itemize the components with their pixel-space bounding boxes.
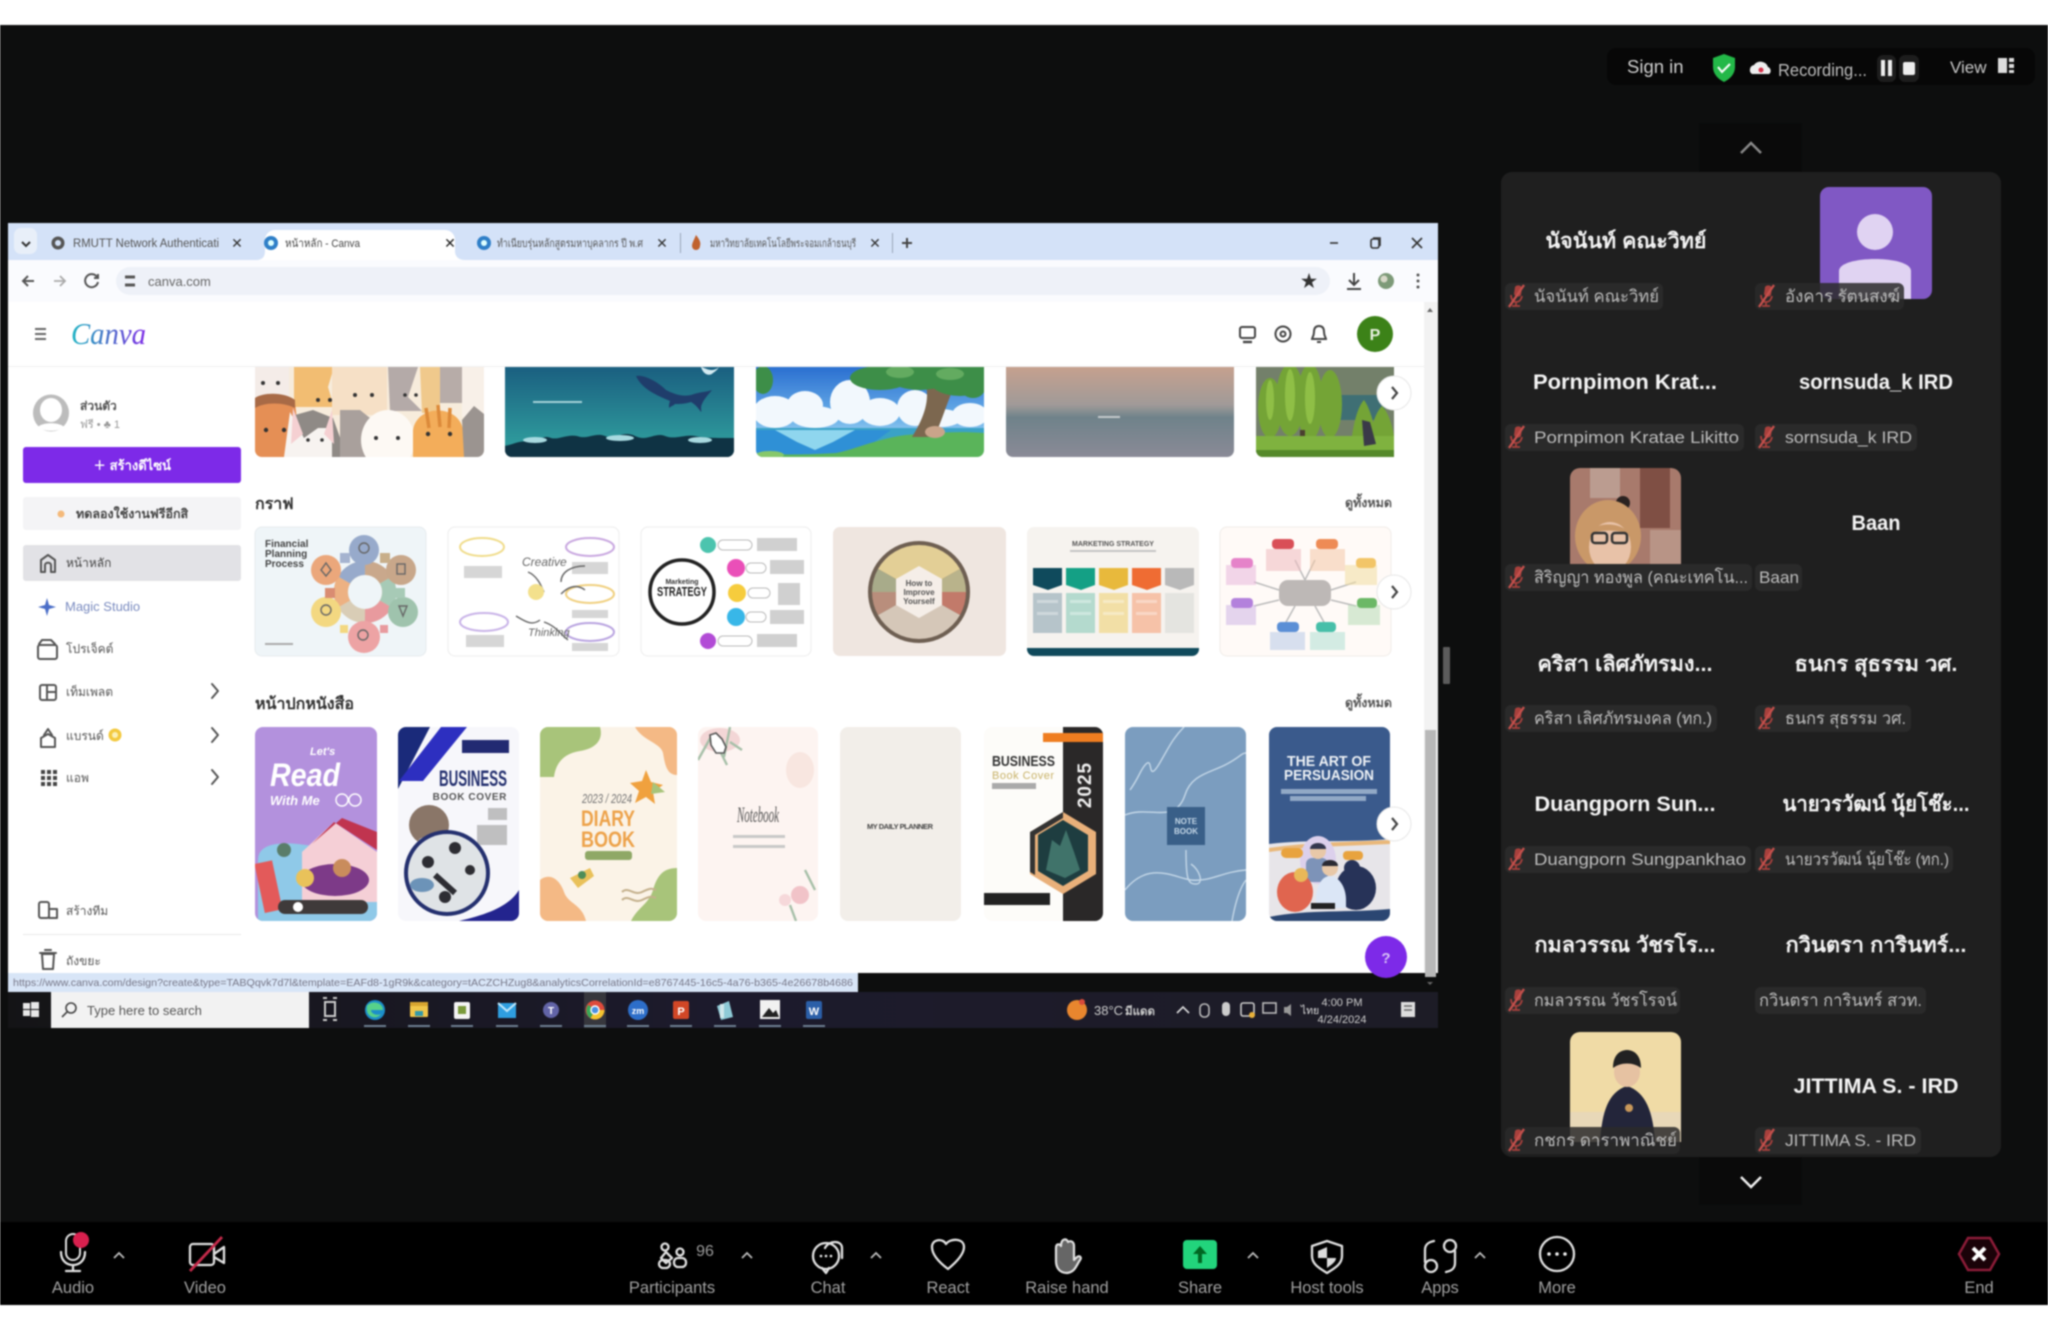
user profile: ฟรี • ♣ 1 [80,418,120,431]
taskbar app icons: zm [632,1006,644,1016]
menu: create team: สร้างทีม [66,904,108,918]
participant: JITTIMA [1755,1075,1958,1154]
system tray: ไทย [1300,1004,1319,1017]
address bar: canva.com [148,274,211,289]
tab: document [477,235,668,251]
menu: projects [38,640,113,659]
book: business book cover: BUSINESS [439,766,507,791]
participant: คริสา: คริสา เลิศภัทรมง... [1538,653,1712,676]
view: View [1950,58,1987,77]
card: concept map tags [1220,527,1391,656]
image row of cats and landscapes [254,366,1412,458]
participants panel [1501,172,2001,1157]
react control: React [926,1279,970,1297]
tab: university: ✕ [869,235,881,251]
tab: university: มหาวิทยาลัยเทคโนโลยีพระจอมเกล้าธนบุรี [710,236,856,250]
menu: home: หน้าหลัก [66,556,111,570]
end control [1959,1238,1999,1297]
top status bar [1607,48,2035,85]
icon: settings [1276,326,1290,342]
profile avatar P: P [1370,327,1381,344]
icon: monitor [1240,327,1255,342]
share control: Share [1178,1279,1222,1297]
address bar [8,260,1438,302]
participant: JITTIMA: JITTIMA S. - IRD [1785,1131,1916,1150]
book: daily planner [840,727,961,921]
book: diary book: BOOK [581,827,635,852]
chevron up button [1699,123,1802,172]
taskbar app icons: W [809,1006,820,1018]
participant: Duangporn: Duangporn Sun... [1534,793,1716,816]
see all link: ดูทั้งหมด [1345,493,1392,511]
image: whale at night [505,367,734,458]
carousel arrow [1377,376,1411,410]
participant: sornsuda [1755,371,1953,451]
participant: กวินตรา [1755,933,1966,1014]
react control [926,1240,970,1297]
taskbar app icons: P [677,1006,685,1018]
participant: กวินตรา: กวินตรา การินทร์... [1786,933,1966,957]
participant: ธนกร: ธนกร สุธรรม วศ. [1785,709,1906,729]
card: financial planning wheel: Financial [265,539,309,550]
participant: นายวรวัฒน์: นายวรวัฒน์ นุ้ยโช๊ะ... [1782,791,1970,818]
end control: End [1964,1279,1994,1297]
audio control: Audio [52,1279,94,1297]
menu: magic studio: Magic Studio [65,599,140,614]
card: marketing strategy columns: MARKETING STRATEGY [1072,541,1154,548]
participant: Baan: Baan [1759,568,1799,587]
help button: ? [1381,950,1391,967]
sign in: Sign in [1627,56,1684,77]
participants control [629,1243,752,1297]
panel splitter handle [1443,647,1450,684]
tab: active Canva: หน้าหลัก - Canva [285,238,361,250]
sidebar [23,394,241,969]
section heading: graphics: กราฟ [255,496,294,513]
address bar: ★ [1300,272,1318,291]
book: Let's Read With Me [254,727,377,921]
trial button: ทดลองใช้งานฟรีอีกสิ [76,506,189,521]
book: note book [1125,727,1246,921]
pause and stop buttons [1877,55,1919,82]
start button [23,1002,39,1017]
book: business book cover [398,727,519,921]
participant: กชกร ดาราพาณิชย์: กชกร ดาราพาณิชย์ [1534,1131,1677,1150]
participant: sornsuda: sornsuda_k IRD [1785,428,1912,447]
menu: templates [40,684,218,700]
more control [1538,1237,1576,1297]
participant: กมลวรรณ [1505,932,1716,1014]
book: business 2025: BUSINESS [992,753,1055,770]
video control: Video [184,1279,226,1297]
system tray: 4:00 PM [1322,997,1362,1009]
participant: สิริญญา ทองพูล [1505,468,1752,591]
Canva page background [8,302,1438,973]
participant: JITTIMA: JITTIMA S. - IRD [1794,1075,1958,1098]
chevron down button [1699,1157,1802,1205]
white bottom band [0,1305,2048,1331]
card: how to improve yourself: Yourself [903,597,935,606]
image: dusk sea [1006,367,1234,457]
page scrollbar [1424,302,1438,985]
participant: นัจนันท์ คณะวิทย์: นัจนันท์ คณะวิทย์ [1534,287,1659,306]
menu: home [23,545,241,581]
video control [184,1237,226,1297]
participant: Pornpimon: Pornpimon Kratae Likitto [1534,428,1739,447]
book: diary book: DIARY [581,806,635,831]
card: marketing strategy: STRATEGY [657,585,707,599]
menu: templates: เท็มเพลต [66,684,113,699]
menu: apps [41,770,218,786]
share control [1178,1240,1258,1297]
weather [1067,999,1155,1020]
card: how to improve yourself: Improve [903,588,935,597]
book: notebook with flowers: Notebook [737,802,780,827]
participant: Pornpimon [1505,371,1744,451]
taskbar app icons [364,992,825,1028]
system tray [1177,997,1415,1026]
image: willow trees [1256,364,1394,457]
menu: create team [39,902,108,918]
taskbar app icons: T [548,1006,554,1017]
book cover row [254,727,1411,921]
weather: 38°C [1094,1003,1123,1018]
graphic cards row [255,527,1411,656]
recording status: Recording... [1778,60,1867,80]
tab: RMUTT [52,235,243,251]
card: mind map: Thinking [528,627,570,639]
participant: คริสา [1505,653,1717,732]
participant: sornsuda: sornsuda_k IRD [1799,371,1953,394]
user profile [33,394,120,432]
menu: brand: แบรนด์ [66,729,104,743]
mouse cursor [710,733,726,753]
menu: projects: โปรเจ็คต์ [66,641,113,656]
book: daily planner: MY DAILY PLANNER [867,822,934,831]
card: marketing strategy [641,527,811,656]
book: the art of persuasion: PERSUASION [1284,768,1374,784]
window controls [1330,238,1422,248]
book: note book: NOTE [1175,817,1198,826]
participants control: 96 [696,1243,714,1260]
icon: bell [1312,326,1326,342]
participant: Pornpimon: Pornpimon Krat... [1533,371,1717,394]
participant: สิริญญา ทองพูล: สิริญญา ทองพูล (คณะเทคโน... [1534,567,1748,588]
participant: นายวรวัฒน์: นายวรวัฒน์ นุ้ยโช๊ะ (ทก.) [1785,849,1949,870]
create design button: ＋ สร้างดีไซน์ [93,457,171,473]
tab: active Canva [256,230,465,260]
carousel arrow [1377,575,1411,609]
participant: นัจนันท์ คณะวิทย์ [1505,229,1706,310]
shared browser window [8,223,1438,1028]
see all link: ดูทั้งหมด [1345,693,1392,711]
host tools control [1290,1241,1364,1297]
participant: ธนกร [1755,653,1958,732]
card: financial planning wheel: Process [265,559,304,570]
participant: Duangporn [1505,793,1751,873]
menu: trash: ถังขยะ [66,954,101,968]
search box: Type here to search [87,1003,202,1018]
card: financial planning wheel: Planning [265,549,307,560]
image: cats [255,367,484,470]
card: mind map [448,527,619,656]
participant: กวินตรา: กวินตรา การินทร์ สวท. [1759,991,1922,1010]
participant: นายวรวัฒน์ [1755,791,1970,873]
book: business 2025: 2025 [1075,762,1096,808]
book: the art of persuasion [1269,727,1390,921]
card: marketing strategy: Marketing [665,579,699,586]
tab: RMUTT: ✕ [231,235,243,251]
icon: green security shield [1713,54,1735,82]
menu: trash [40,950,101,969]
book: Let's Read With Me: Read [270,757,341,793]
weather: มีแดด [1125,1005,1155,1018]
menu: apps: แอพ [66,771,89,785]
Canva logo: Canva [71,316,146,351]
chat control: Chat [811,1279,846,1297]
help button [1365,936,1407,978]
participant: กชกร ดาราพาณิชย์ [1505,1032,1681,1154]
trial button [23,497,241,530]
user profile: ส่วนตัว [80,399,117,413]
apps control [1421,1240,1485,1297]
participant: คริสา: คริสา เลิศภัทรมงคล (ทก.) [1534,709,1712,728]
participants control: Participants [629,1279,715,1297]
task view [323,998,337,1020]
create design button [23,447,241,483]
system tray: 4/24/2024 [1318,1014,1366,1026]
search box [51,992,309,1028]
more control: More [1538,1279,1576,1297]
participant: ธนกร: ธนกร สุธรรม วศ. [1794,653,1958,678]
participant: Duangporn: Duangporn Sungpankhao [1534,850,1746,869]
apps control: Apps [1421,1279,1459,1297]
section heading: book covers: หน้าปกหนังสือ [255,695,354,713]
host tools control: Host tools [1290,1279,1364,1297]
book: diary book [540,727,677,921]
book: business 2025: Book Cover [992,770,1054,782]
menu: magic studio [38,598,140,616]
book: Let's Read With Me: With Me [270,793,320,808]
book: note book: BOOK [1174,827,1198,836]
tab: active Canva: ✕ [444,235,456,251]
Zoom toolbar [0,1222,2048,1305]
tab: document: ทำเนียบรุ่นหลักสูตรมหาบุคลากร ปี พ.ศ [497,237,643,250]
raise hand control: Raise hand [1025,1279,1109,1297]
participant: Baan: Baan [1852,512,1900,535]
card: marketing strategy columns [1027,527,1199,656]
view [1950,58,2014,77]
menu: brand [41,728,218,747]
participant: กมลวรรณ: กมลวรรณ วัชรโร... [1534,932,1716,957]
carousel arrow [1377,807,1411,841]
card: financial planning wheel [255,527,426,656]
book: the art of persuasion: THE ART OF [1287,754,1371,770]
book: business book cover: BOOK COVER [433,792,507,803]
raise hand control [1025,1239,1109,1297]
participant: อังคาร รัตนสงฆ์ [1755,187,1932,310]
book: notebook with flowers [698,727,818,921]
book: Let's Read With Me: Let's [310,746,335,758]
book: diary book: 2023 / 2024 [581,791,632,806]
participant: นัจนันท์ คณะวิทย์: นัจนันท์ คณะวิทย์ [1546,229,1706,253]
tab: RMUTT: RMUTT Network Authenticati [73,238,219,250]
card: how to improve yourself: How to [906,579,932,588]
book: business 2025 [984,727,1103,921]
hover URL status bar: https://www.canva.com/design?create&type=TABQqvk7d7l&template=EAFd8-1gR9k&category=tACZCHZug8&analyticsCorrelationId=e8767445-16c5-4a76-b365-4e26678b4686 [13,977,853,989]
participant: อังคาร รัตนสงฆ์: อังคาร รัตนสงฆ์ [1785,287,1900,306]
image: lake and tree [755,366,985,458]
white top band [0,0,2048,25]
profile avatar P [1357,316,1393,352]
browser tab strip [8,223,1438,260]
participant: กมลวรรณ: กมลวรรณ วัชรโรจน์ [1534,990,1677,1010]
hover URL status bar [8,973,858,992]
Canva header [8,302,1424,367]
card: how to improve yourself [833,527,1006,656]
tab: university [680,233,912,253]
Windows taskbar [8,992,1438,1028]
audio control [52,1232,124,1297]
participant: Baan [1755,512,1900,591]
chat control [811,1242,881,1297]
tab: document: ✕ [656,235,668,251]
card: mind map: Creative [522,555,567,569]
